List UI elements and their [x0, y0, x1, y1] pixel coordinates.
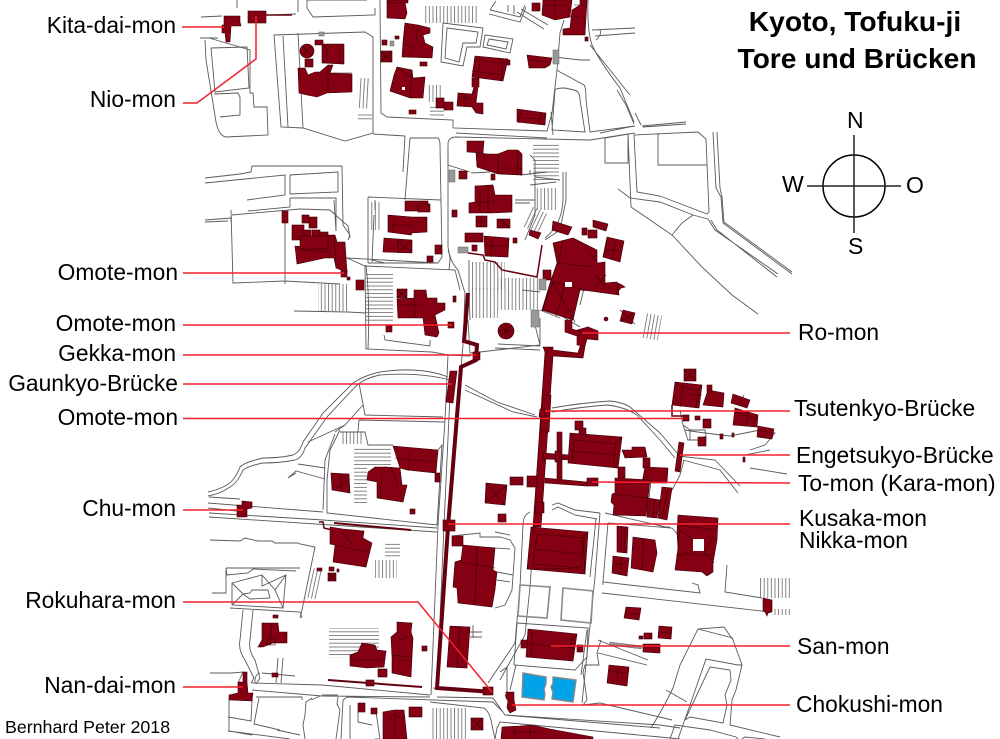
buildings south-west: [258, 446, 593, 739]
title: Tore und Brücken: [737, 42, 977, 74]
roof details: [267, 0, 773, 739]
parking and stripe areas: [306, 6, 790, 739]
buildings west Omote-mon: [292, 215, 456, 337]
gate labels left: Omote-mon: [58, 259, 178, 285]
gate labels left: Kita-dai-mon: [47, 12, 176, 38]
buildings centre-north: [383, 141, 635, 339]
white courtyards: [402, 87, 704, 551]
road network: [200, 0, 792, 739]
gate labels left: Nio-mon: [90, 86, 176, 112]
gates: [222, 11, 772, 713]
credit: Bernhard Peter 2018: [5, 717, 170, 737]
gate labels right: Ro-mon: [798, 319, 879, 345]
gate labels left: Omote-mon: [58, 404, 178, 430]
gray steps: [319, 32, 642, 649]
gate labels left: Rokuhara-mon: [25, 587, 176, 613]
gate labels left: Nan-dai-mon: [44, 672, 176, 698]
gate labels right: [794, 319, 996, 717]
compass: O: [906, 172, 924, 198]
title: [737, 5, 977, 74]
gate labels right: Tsutenkyo-Brücke: [794, 395, 975, 421]
gate labels left: Gekka-mon: [58, 340, 176, 366]
compass: N: [847, 107, 864, 133]
gray walled courts: [518, 585, 593, 623]
walled corridor buildings: [533, 340, 587, 527]
gate labels right: To-mon (Kara-mon): [798, 470, 996, 496]
compass: W: [782, 171, 804, 197]
gate labels left: [8, 12, 178, 698]
gate labels left: Gaunkyo-Brücke: [8, 370, 178, 396]
gate labels right: Nikka-mon: [799, 527, 908, 553]
leader lines: [182, 16, 790, 705]
compass: S: [848, 233, 863, 259]
buildings centre-south: [447, 476, 672, 686]
buildings north-west: [282, 0, 588, 223]
gate labels left: Chu-mon: [82, 495, 176, 521]
gate labels right: Chokushi-mon: [796, 691, 943, 717]
gate labels right: Engetsukyo-Brücke: [796, 442, 994, 468]
gate labels right: Kusaka-mon: [799, 505, 927, 531]
main temple complex: [542, 238, 619, 320]
gate labels right: San-mon: [797, 633, 890, 659]
dark walls and corridors: [266, 15, 684, 692]
gate labels left: Omote-mon: [56, 310, 176, 336]
pagoda outlines and gray compounds: [232, 1, 548, 608]
buildings east: [568, 369, 774, 576]
compass: [782, 107, 924, 259]
ponds: [522, 673, 576, 702]
title: Kyoto, Tofuku-ji: [749, 5, 961, 37]
